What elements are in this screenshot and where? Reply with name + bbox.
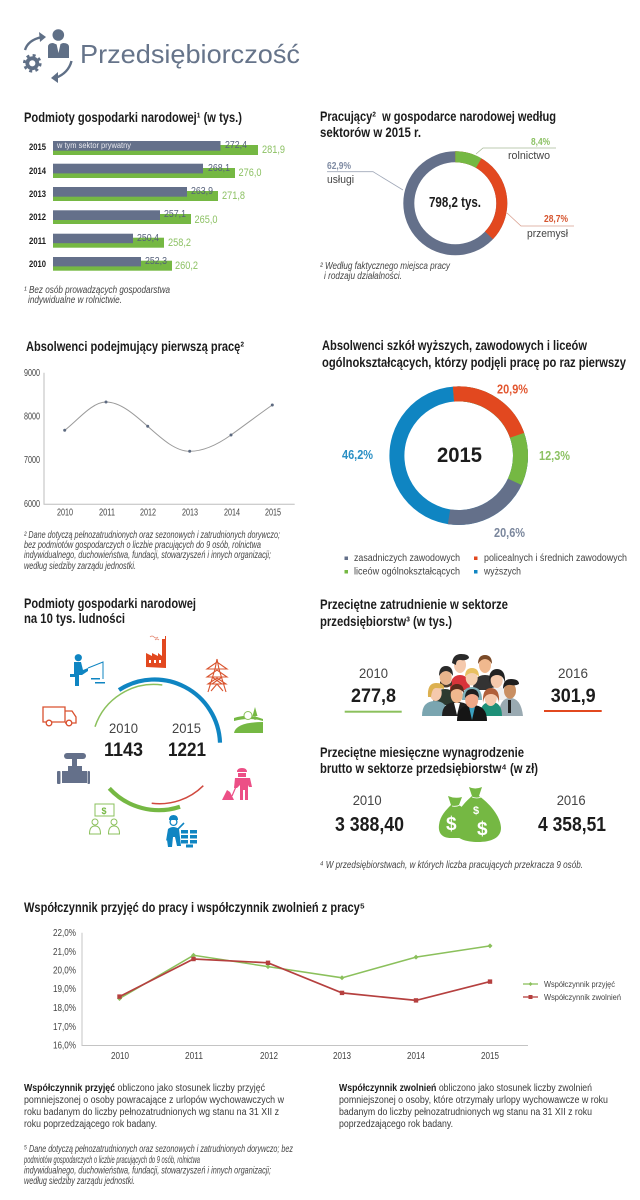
heading <box>24 595 196 626</box>
heading: brutto w sektorze przedsiębiorstw⁴ (w zł) <box>320 760 538 776</box>
panel: współczynnik przyjęć i zwolnień <box>23 899 621 1187</box>
bar chart: 258,2 <box>168 237 191 249</box>
footnote 5: indywidualnego, duchowieństwa, fundacji, stowarzyszeń i innych organizacji; <box>24 1166 271 1176</box>
heading: Absolwenci podejmujący pierwszą pracę² <box>26 338 244 354</box>
icon: power pylon <box>207 659 227 692</box>
icon: money bags: $ <box>446 814 457 835</box>
bar chart: 265,0 <box>194 214 218 226</box>
definition: współczynnik zwolnień <box>339 1083 608 1130</box>
footnote 2 long <box>24 530 280 572</box>
heading: Przeciętne zatrudnienie w sektorze <box>320 596 508 612</box>
panel: absolwenci szkół donut <box>322 337 627 578</box>
bar chart: 250,4 <box>137 233 159 244</box>
values 2010 and 2015: 1143 <box>104 740 143 761</box>
definition: współczynnik zwolnień: Współczynnik zwolnień obliczono jako stosunek liczby zwolnień <box>339 1083 592 1094</box>
value 2010 <box>335 792 404 836</box>
footnote 2 long: według siedziby zarządu jednostki. <box>24 561 136 572</box>
heading <box>322 337 626 370</box>
line chart: 22,0% <box>53 928 76 939</box>
value 2016: 301,9 <box>551 686 596 707</box>
legend: liceów ogólnokształcących <box>354 566 460 578</box>
donut chart <box>392 389 525 522</box>
icon: builder with bricks <box>166 815 197 848</box>
legend <box>344 553 627 578</box>
panel: podmioty gospodarki bar chart <box>24 109 285 306</box>
line chart: 8000 <box>24 412 40 422</box>
line chart: 17,0% <box>53 1022 76 1033</box>
donut chart <box>409 157 502 250</box>
bar chart: 271,8 <box>222 190 245 202</box>
bar chart: 2012 <box>29 212 46 222</box>
footnote 2 long: ² Dane dotyczą pełnozatrudnionych oraz sezonowych i zatrudnionych dorywczo; <box>24 530 280 541</box>
value 2016: 2016 <box>557 792 586 808</box>
definition: współczynnik zwolnień: poprzedzającego rok badany. <box>339 1119 453 1130</box>
line chart: 2011 <box>99 508 115 518</box>
donut labels: 46,2% <box>342 447 373 462</box>
callout: rolnictwo: 8,4% <box>531 137 550 148</box>
icon: money bags: $ <box>473 805 479 817</box>
footnote 2: i rodzaju działalności. <box>324 271 402 282</box>
icon: truck <box>43 707 76 726</box>
line chart: 2014 <box>407 1051 425 1062</box>
footnote 5 <box>23 1144 293 1187</box>
bar chart: 276,0 <box>238 167 262 179</box>
heading: Współczynnik przyjęć do pracy i współczynnik zwolnień z pracy⁵ <box>24 899 365 915</box>
definition: współczynnik zwolnień: badanym do liczby pełnozatrudnionych wg stanu na 31 XII z roku <box>339 1107 592 1118</box>
footnote 4: ⁴ W przedsiębiorstwach, w których liczba pracujących przekracza 9 osób. <box>320 860 583 871</box>
bar chart: 2013 <box>29 189 46 199</box>
heading: sektorów w 2015 r. <box>320 124 421 140</box>
footnote 5: według siedziby zarządu jednostki. <box>24 1176 135 1187</box>
line chart: 2015 <box>481 1051 499 1062</box>
definition: współczynnik przyjęć: roku badanym do liczby pełnozatrudnionych wg stanu na 31 XII z <box>24 1107 279 1118</box>
value 2010 <box>345 665 402 713</box>
definition: współczynnik przyjęć: roku poprzedzającego rok badany. <box>24 1119 157 1130</box>
footnote 2 long: bez podmiotów gospodarczych o liczbie pracujących do 9 osób, rolnictwa <box>24 540 261 551</box>
icon: businessman with gear and arrows <box>24 29 72 83</box>
donut labels: 12,3% <box>539 448 570 463</box>
bar chart: 281,9 <box>262 144 285 156</box>
icon: money bags: $ <box>477 819 488 840</box>
line chart: 2013 <box>333 1051 351 1062</box>
heading: Podmioty gospodarki narodowej¹ (w tys.) <box>24 109 242 125</box>
value 2016 <box>544 665 602 712</box>
callout: rolnictwo <box>476 137 556 162</box>
panel: przeciętne zatrudnienie <box>320 596 602 721</box>
legend: wyższych <box>483 566 521 578</box>
footnote 1 <box>24 285 170 306</box>
heading: Przeciętne miesięczne wynagrodzenie <box>320 744 524 760</box>
icon: group of people <box>422 654 523 721</box>
callout: przemysł <box>507 213 574 240</box>
callout: przemysł: 28,7% <box>544 214 568 225</box>
icon: worker at desk <box>70 654 105 686</box>
line chart: 21,0% <box>53 947 76 958</box>
line chart: 2011 <box>185 1051 203 1062</box>
icon: miner <box>222 768 252 800</box>
value 2016: 2016 <box>558 665 588 681</box>
heading <box>320 108 556 140</box>
line chart: 18,0% <box>53 1003 76 1014</box>
bar chart: 268,1 <box>208 163 230 174</box>
donut labels <box>342 382 570 540</box>
value 2016: 4 358,51 <box>538 814 606 836</box>
bar chart: 2014 <box>29 166 46 176</box>
value 2010: 3 388,40 <box>335 814 404 836</box>
definition: współczynnik przyjęć: pomniejszonej o osoby powracające z urlopów wychowawczych w <box>24 1095 285 1106</box>
callout: usługi: usługi <box>327 174 354 186</box>
callout: usługi: 62,9% <box>327 161 351 172</box>
line chart: 9000 <box>24 368 40 379</box>
header: page title with logo <box>24 29 300 83</box>
line chart: 2012 <box>260 1051 278 1062</box>
donut total: 798,2 tys. <box>429 195 481 211</box>
definition: współczynnik przyjęć <box>24 1083 285 1130</box>
footnote 5: ⁵ Dane dotyczą pełnozatrudnionych oraz sezonowych i zatrudnionych dorywczo; bez <box>24 1144 293 1155</box>
heading <box>320 596 508 629</box>
heading: Podmioty gospodarki narodowej <box>24 595 196 611</box>
line chart: 19,0% <box>53 984 76 995</box>
value 2010: 2010 <box>353 792 382 808</box>
donut year: 2015 <box>437 444 482 467</box>
legend: Współczynnik zwolnień <box>544 992 621 1002</box>
bar chart: 260,2 <box>175 260 198 272</box>
footnote 1: indywidualne w rolnictwie. <box>28 295 122 306</box>
footnote 2: ² Według faktycznego miejsca pracy <box>320 261 451 272</box>
bar chart: 272,4 <box>225 140 247 151</box>
values 2010 and 2015 <box>104 720 206 761</box>
definition: współczynnik przyjęć: Współczynnik przyjęć obliczono jako stosunek liczby przyjęć <box>24 1083 265 1094</box>
footnote 5: podmiotów gospodarczych o liczbie pracujących do 9 osób, rolnictwa <box>23 1155 200 1166</box>
heading: Pracujący² w gospodarce narodowej według <box>320 108 556 124</box>
icon: money bags <box>439 787 501 842</box>
icon: factory <box>146 636 166 668</box>
legend: zasadniczych zawodowych <box>354 553 460 564</box>
panel: podmioty na 10 tys. ludności <box>24 595 263 848</box>
bar chart <box>29 140 285 272</box>
legend <box>523 979 621 1002</box>
callout: przemysł: przemysł <box>527 228 569 240</box>
line chart <box>53 928 528 1062</box>
callout: rolnictwo: rolnictwo <box>508 150 550 162</box>
values 2010 and 2015: 1221 <box>168 740 206 761</box>
panel: absolwenci line chart <box>24 338 295 572</box>
heading: na 10 tys. ludności <box>24 610 125 626</box>
footnote 2 <box>320 261 451 282</box>
donut labels: 20,9% <box>497 382 528 396</box>
line chart: 2010 <box>111 1051 129 1062</box>
definition: współczynnik zwolnień: pomniejszonej o osoby, które otrzymały urlopy wychowawcze w roku <box>339 1095 608 1106</box>
heading <box>320 744 538 776</box>
line chart: 6000 <box>24 499 40 510</box>
bar chart: 2015 <box>29 142 46 152</box>
bar chart: 2011 <box>29 236 46 246</box>
line chart <box>24 368 295 518</box>
value 2016 <box>538 792 606 836</box>
icon: money and people: $ <box>102 806 107 816</box>
bar chart: 252,3 <box>145 256 167 267</box>
legend: policealnych i średnich zawodowych <box>484 553 627 564</box>
values 2010 and 2015: 2010 <box>109 720 138 736</box>
line chart: 2013 <box>182 508 198 518</box>
line chart: 2015 <box>265 508 281 518</box>
callout: usługi <box>327 161 403 190</box>
footnote 2 long: indywidualnego, duchowieństwa, fundacji, stowarzyszeń i innych organizacji; <box>24 550 271 561</box>
title: Przedsiębiorczość <box>80 39 300 69</box>
bar chart: 2010 <box>29 259 46 269</box>
value 2010: 2010 <box>359 665 388 681</box>
panel: pracujący donut <box>320 108 574 282</box>
legend: Współczynnik przyjęć <box>544 979 616 989</box>
line chart: 2010 <box>57 508 73 518</box>
panel: przeciętne wynagrodzenie <box>320 744 606 871</box>
donut labels: 20,6% <box>494 525 525 540</box>
line chart: 2012 <box>140 508 156 518</box>
line chart: 20,0% <box>53 966 76 976</box>
bar chart: w tym sektor prywatny <box>56 140 132 150</box>
icon: pipe valve <box>57 753 90 784</box>
line chart: 2014 <box>224 508 240 518</box>
heading: przedsiębiorstw³ (w tys.) <box>320 613 452 629</box>
icon: money and people <box>90 804 120 834</box>
value 2010: 277,8 <box>351 686 396 707</box>
footnote 1: ¹ Bez osób prowadzących gospodarstwa <box>24 285 170 296</box>
bar chart: 263,9 <box>191 186 213 197</box>
line chart: 16,0% <box>53 1040 76 1052</box>
icon: landscape <box>234 707 263 733</box>
bar chart: 257,1 <box>164 209 186 220</box>
circular arcs <box>95 680 220 810</box>
line chart: 7000 <box>24 455 40 466</box>
values 2010 and 2015: 2015 <box>172 720 201 736</box>
